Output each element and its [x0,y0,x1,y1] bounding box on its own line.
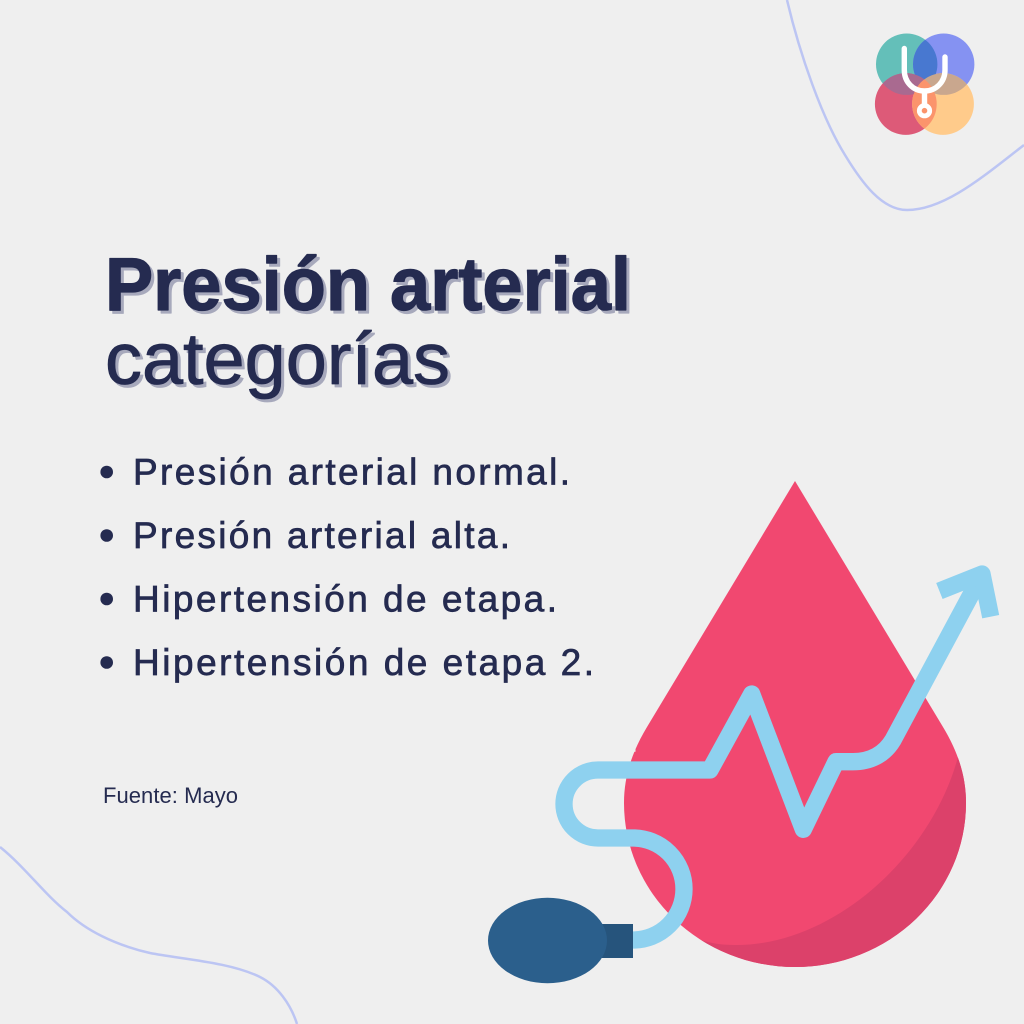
blood drop [624,481,980,980]
title [105,242,631,400]
title: Presión arterial [105,242,631,326]
bullet list: Presión arterial alta. [133,515,510,556]
decorative curve: top right [787,0,1024,210]
bullet list: Hipertensión de etapa. [133,578,557,619]
source note: Fuente: Mayo [103,783,238,808]
bullet list [100,451,594,683]
illustration: blood drop with pressure cuff line and arrow [488,481,991,983]
decorative curve: bottom left [0,847,297,1024]
hand pump bulb [488,898,633,983]
bullet list: Hipertensión de etapa 2. [133,642,594,683]
bullet list: Presión arterial normal. [133,451,570,492]
logo: stethoscope over overlapping circles [875,33,974,135]
rising pulse tube and arrow [564,574,991,940]
title: categorías [105,319,450,400]
